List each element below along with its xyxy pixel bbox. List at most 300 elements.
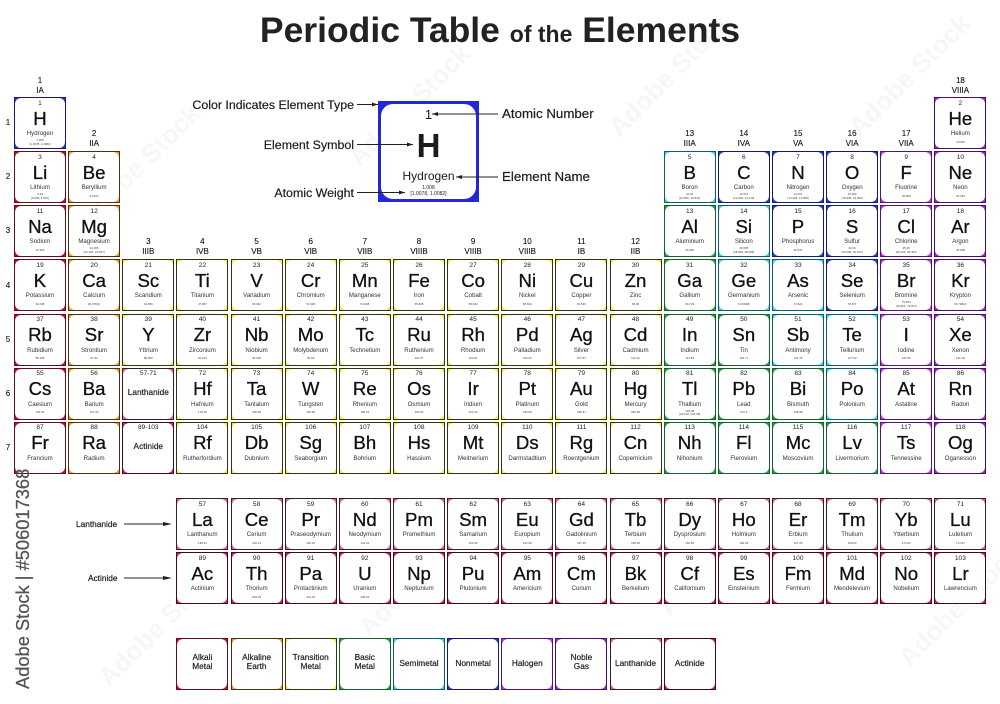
element Cd: Cd (624, 324, 647, 345)
element Ni: 58.693 (523, 302, 532, 306)
element Fl: 114 (739, 424, 749, 431)
element Th: 232.04 (252, 594, 261, 598)
element Rg: Roentgenium (563, 455, 600, 462)
element Li: 3 (38, 154, 42, 161)
element Ta: Ta (247, 378, 266, 399)
key tile: hydrogen: 1.008 (422, 185, 435, 191)
element Gd: Gadolinium (566, 531, 597, 538)
key tile: hydrogen: H (417, 127, 440, 164)
element N: 14.007 (794, 192, 802, 196)
element Bh (339, 422, 391, 474)
element Sr: Sr (85, 324, 103, 345)
element Br: 35 (903, 262, 910, 269)
element Zn: 30 (632, 262, 639, 269)
element Tm (826, 498, 878, 550)
element Ti (176, 259, 228, 311)
element Na (14, 205, 66, 257)
element Y (122, 314, 174, 366)
element Ta: 180.95 (252, 410, 261, 414)
element F (880, 151, 932, 203)
element Ra: 88 (90, 424, 98, 431)
label: lanthanide arrow (76, 519, 172, 529)
element Re: Re (353, 378, 377, 399)
element Bh: Bh (353, 432, 376, 453)
element Y: 39 (145, 316, 152, 323)
element Dy (664, 498, 716, 550)
element O: [15.999, 16.000] (842, 196, 863, 200)
element Os (393, 368, 445, 420)
element N: [14.006, 14.008] (788, 196, 808, 200)
element Er (772, 498, 824, 550)
element V: 50.942 (252, 302, 261, 306)
element Ag: 107.87 (577, 356, 586, 360)
element Tl: 81 (686, 370, 693, 377)
element Sn (718, 314, 770, 366)
group labels (36, 76, 970, 256)
element Tc: Technetium (349, 347, 380, 354)
placeholder Actinide: 89-103 (138, 424, 159, 431)
element Rh: Rh (461, 324, 485, 345)
element F: 9 (904, 154, 908, 161)
element H: [1.0078, 1.0082] (30, 142, 50, 146)
element N: N (791, 162, 805, 183)
element Pm: 61 (415, 501, 423, 508)
element Rn: Rn (948, 378, 972, 399)
element Th: 90 (253, 555, 260, 562)
element I (880, 314, 932, 366)
text: Adobe Stock (92, 558, 226, 692)
element Ce (231, 498, 283, 550)
element Th: Thorium (245, 585, 268, 592)
element Cs (14, 368, 66, 420)
element Rg (555, 422, 607, 474)
element Am (501, 552, 553, 604)
element Fe: Iron (414, 292, 424, 299)
element Th (231, 552, 283, 604)
element Bi: 83 (794, 370, 802, 377)
element Ar: 39.948 (956, 248, 965, 252)
legend item: transition metal: Metal (301, 660, 321, 670)
legend item: actinide: Actinide (675, 658, 704, 668)
element N: 7 (796, 154, 800, 161)
text: Adobe Stock (602, 8, 736, 142)
element P (772, 205, 824, 257)
element B: 10.81 (686, 192, 693, 196)
element Eu (501, 498, 553, 550)
element Mn: Manganese (349, 292, 381, 299)
element Sr: 87.62 (90, 356, 98, 360)
element Cl: Cl (897, 216, 915, 237)
legend item: halogen (501, 638, 553, 690)
element Pa: Protactinium (294, 585, 328, 592)
element C: 12.011 (739, 192, 748, 196)
element Sc: Sc (137, 270, 159, 291)
element N: Nitrogen (786, 184, 810, 191)
element Mn (339, 259, 391, 311)
element He: He (948, 108, 972, 129)
element Sc: 44.956 (144, 302, 153, 306)
group labels: 15 (794, 129, 802, 138)
element Sb (772, 314, 824, 366)
element Sg: 106 (305, 424, 316, 431)
element H: 1 (38, 100, 42, 107)
legend item: semimetal (393, 638, 445, 690)
element Pu: Pu (462, 563, 484, 584)
element Pd: Pd (516, 324, 539, 345)
element Tc: Tc (356, 324, 374, 345)
element As: 74.922 (794, 302, 802, 306)
element Nh: Nihonium (677, 455, 703, 462)
element Nh: 113 (684, 424, 695, 431)
element Gd: 157.25 (577, 540, 586, 544)
element Na: Sodium (30, 238, 50, 245)
element Ce: Ce (245, 509, 268, 530)
element Cu (555, 259, 607, 311)
element Ra: Ra (82, 432, 106, 453)
element No: 102 (901, 555, 912, 562)
element Ne: 10 (957, 154, 964, 161)
element Al: 26.982 (685, 248, 694, 252)
legend item: nonmetal: Nonmetal (455, 658, 491, 668)
element Cr: Cr (301, 270, 320, 291)
group labels: 4 (200, 237, 205, 246)
element C: 6 (742, 154, 746, 161)
element Y: Yttrium (139, 347, 158, 354)
group labels: 13 (685, 129, 694, 138)
element Cd: 48 (632, 316, 639, 323)
element Te (826, 314, 878, 366)
element Br: 79.904 (902, 300, 911, 304)
element Sm: Sm (459, 509, 487, 530)
element Am: Americium (513, 585, 542, 592)
element Fl: Fl (736, 432, 752, 453)
element Cu: Copper (571, 292, 591, 299)
element Lv: Lv (842, 432, 862, 453)
element At: At (897, 378, 915, 399)
element P: 15 (794, 208, 802, 215)
element Nh (664, 422, 716, 474)
element Pb: 82 (740, 370, 747, 377)
element Yb: Ytterbium (893, 531, 919, 538)
group labels: 16 (848, 129, 857, 138)
element V: Vanadium (243, 292, 270, 299)
element Hf: 72 (199, 370, 206, 377)
element Tl: Thallium (678, 401, 701, 408)
element Cd: 112.41 (631, 356, 640, 360)
element Ir: Ir (467, 378, 479, 399)
element O: Oxygen (842, 184, 863, 191)
text: Adobe Stock (652, 488, 786, 622)
element Na: Na (28, 216, 52, 237)
element Os: 190.23 (415, 410, 423, 414)
element La: 138.91 (198, 540, 207, 544)
element Ge (718, 259, 770, 311)
element Mg (68, 205, 120, 257)
element Co: Co (461, 270, 485, 291)
text: Adobe Stock (792, 228, 926, 362)
group labels: 3 (146, 237, 151, 246)
element Xe (934, 314, 986, 366)
element Rf: Rutherfordium (183, 455, 222, 462)
element Be: Beryllium (82, 184, 107, 191)
element H: 1.008 (36, 138, 44, 142)
element Na: 11 (37, 208, 43, 215)
element Po (826, 368, 878, 420)
element Md: Md (839, 563, 865, 584)
element N (772, 151, 824, 203)
element Te: 52 (848, 316, 856, 323)
element K: K (34, 270, 46, 291)
element Lr (934, 552, 986, 604)
element K: 19 (36, 262, 44, 269)
element P: Phosphorus (782, 238, 814, 245)
element Be: Be (83, 162, 105, 183)
element Pa: 91 (307, 555, 314, 562)
element Nd: 144.24 (360, 540, 369, 544)
element Yb: 70 (903, 501, 910, 508)
element Fe (393, 259, 445, 311)
element Nb: 41 (253, 316, 260, 323)
element Pb: 207.2 (740, 410, 747, 414)
element Br: Bromine (895, 292, 918, 299)
element Mg: [24.304, 24.307] (84, 250, 105, 254)
element Cm (555, 552, 607, 604)
element La: 57 (199, 501, 206, 508)
element Cl: Chlorine (895, 238, 918, 245)
element V (231, 259, 283, 311)
element Si: Si (736, 216, 752, 237)
element Db: Dubnium (244, 455, 269, 462)
element Sc: Scandium (135, 292, 162, 299)
element Mt (447, 422, 499, 474)
element Ga: 69.723 (685, 302, 694, 306)
group labels: VB (251, 247, 262, 256)
element Eu: 63 (524, 501, 531, 508)
element Sg: Sg (299, 432, 322, 453)
element Co: 27 (469, 262, 477, 269)
element Bk: 97 (632, 555, 639, 562)
element Kr: 36 (957, 262, 964, 269)
element Zn (610, 259, 662, 311)
element W: W (302, 378, 319, 399)
title: Periodic Table of the Elements (260, 10, 740, 50)
element Mn: 54.938 (360, 302, 369, 306)
element Ra (68, 422, 120, 474)
element Pa: 231.04 (306, 594, 315, 598)
element Cl: 17 (903, 208, 910, 215)
element U (339, 552, 391, 604)
element Lu: 174.97 (956, 540, 965, 544)
element Se: Selenium (839, 292, 865, 299)
element Rn: 86 (957, 370, 964, 377)
element C (718, 151, 770, 203)
element Ts: 117 (901, 424, 911, 431)
group labels: VIIIB (519, 247, 536, 256)
element Ar: 18 (957, 208, 964, 215)
element Ir: Iridium (464, 401, 482, 408)
element O (826, 151, 878, 203)
element Pb (718, 368, 770, 420)
key tile: hydrogen: [1.0078, 1.0082] (410, 191, 447, 197)
element Be: 4 (92, 154, 96, 161)
legend item: alkaline earth: Earth (247, 660, 267, 670)
element Tm: 168.93 (848, 540, 857, 544)
element Li: 6.94 (37, 192, 43, 196)
element Cd: Cadmium (622, 347, 649, 354)
element Mo (285, 314, 337, 366)
label: actinide arrow (88, 573, 172, 583)
group labels: 14 (739, 129, 748, 138)
element Np: Np (407, 563, 431, 584)
element Se: Se (841, 270, 863, 291)
label: actinide arrow: Actinide (88, 573, 118, 583)
element Pt: Platinum (515, 401, 539, 408)
element Yb: 173.05 (902, 540, 911, 544)
element Re: 75 (361, 370, 368, 377)
element Rf (176, 422, 228, 474)
element Tm: Thulium (841, 531, 863, 538)
element Li: Li (33, 162, 47, 183)
element S: 16 (848, 208, 856, 215)
element Tc: 43 (361, 316, 368, 323)
element Po: Po (841, 378, 863, 399)
element Pb: Pb (732, 378, 755, 399)
element Co (447, 259, 499, 311)
group labels: 12 (631, 237, 640, 246)
element Hf: 178.49 (198, 410, 207, 414)
element C: Carbon (734, 184, 754, 191)
element Sb: Sb (787, 324, 809, 345)
period labels: 2 (6, 172, 10, 181)
element Cn: 112 (630, 424, 641, 431)
element S: S (846, 216, 858, 237)
element Cm: 96 (578, 555, 585, 562)
legend item: actinide (664, 638, 716, 690)
element Al (664, 205, 716, 257)
lanthanide and actinide series (76, 498, 986, 604)
text: Adobe Stock (492, 248, 626, 382)
element Tl: [204.38, 204.39] (679, 412, 700, 416)
group labels: 17 (902, 129, 911, 138)
element Dy: Dy (678, 509, 701, 530)
key tile: hydrogen: Hydrogen (402, 169, 455, 183)
element Ca: Calcium (83, 292, 105, 299)
element H: Hydrogen (27, 130, 53, 137)
element O: 8 (850, 154, 854, 161)
element Md: 101 (847, 555, 858, 562)
element Ts: Tennessine (891, 455, 922, 462)
element In: In (682, 324, 697, 345)
group labels: 9 (471, 237, 475, 246)
element In: 49 (686, 316, 693, 323)
element Sn: Tin (740, 347, 748, 354)
element Bk: Bk (625, 563, 646, 584)
element Pr: Praseodymium (290, 531, 331, 538)
element Pr: 59 (307, 501, 314, 508)
element Rb (14, 314, 66, 366)
text: Adobe Stock (352, 508, 486, 642)
element Dy: Dysprosium (674, 531, 706, 538)
element F: F (900, 162, 912, 183)
element Tc (339, 314, 391, 366)
element V: 23 (253, 262, 260, 269)
element Rn (934, 368, 986, 420)
element Zn: Zinc (630, 292, 641, 299)
element Br (880, 259, 932, 311)
element Sn: Sn (732, 324, 755, 345)
legend item: basic metal: Metal (355, 660, 375, 670)
element Lv: 116 (847, 424, 857, 431)
element Og: 118 (955, 424, 966, 431)
element Er: Er (789, 509, 807, 530)
element Ne: Ne (948, 162, 972, 183)
element Se: 78.971 (848, 302, 857, 306)
element Ba (68, 368, 120, 420)
element B: B (683, 162, 696, 183)
element Rb: Rubidium (27, 347, 53, 354)
element Es: Einsteinium (728, 585, 760, 592)
placeholder Lanthanide: 57-71 (140, 370, 157, 377)
element Ba: 137.33 (90, 410, 99, 414)
element Nd (339, 498, 391, 550)
element Zn: Zn (625, 270, 646, 291)
legend item: alkali metal (176, 638, 228, 690)
element Po: Polonium (839, 401, 865, 408)
element Ag: Ag (570, 324, 593, 345)
label: atomic number: Atomic Number (502, 106, 594, 121)
element Sm: Samarium (459, 531, 487, 538)
element In (664, 314, 716, 366)
element Bh: Bohrium (353, 455, 376, 462)
element Yb: Yb (895, 509, 918, 530)
group labels: 11 (577, 237, 586, 246)
legend item: semimetal: Semimetal (399, 658, 439, 668)
element Fr: Francium (27, 455, 53, 462)
element Ir: 77 (469, 370, 477, 377)
element Fm (772, 552, 824, 604)
element Ar (934, 205, 986, 257)
legend key: how to read an element tile (192, 98, 594, 202)
element Ho: 164.93 (739, 540, 748, 544)
element Kr (934, 259, 986, 311)
element Al: 13 (686, 208, 693, 215)
element Fm: Fm (785, 563, 811, 584)
element Zn: 65.38 (632, 302, 639, 306)
element K (14, 259, 66, 311)
element Mo: Mo (298, 324, 324, 345)
element C: [12.009, 12.012] (733, 196, 754, 200)
group labels: VIIA (899, 139, 914, 148)
element Xe: Xenon (952, 347, 969, 354)
group labels: VIIIB (410, 247, 428, 256)
element Au: Au (570, 378, 593, 399)
group labels: IIB (631, 247, 640, 256)
element Fr: 87 (36, 424, 44, 431)
element Sb: 121.76 (794, 356, 802, 360)
element Dy: 162.50 (685, 540, 694, 544)
element Cl: [35.446, 35.457] (896, 250, 917, 254)
element Cr (285, 259, 337, 311)
period labels: 1 (6, 118, 10, 127)
element U: 92 (361, 555, 368, 562)
element Xe: Xe (949, 324, 972, 345)
legend item: alkali metal: Metal (192, 660, 213, 670)
element Ni (501, 259, 553, 311)
element Re: 186.21 (360, 410, 369, 414)
element Tb (610, 498, 662, 550)
element V: V (250, 270, 263, 291)
label: color indicates element type: Color Indicates Element Type (192, 98, 354, 112)
